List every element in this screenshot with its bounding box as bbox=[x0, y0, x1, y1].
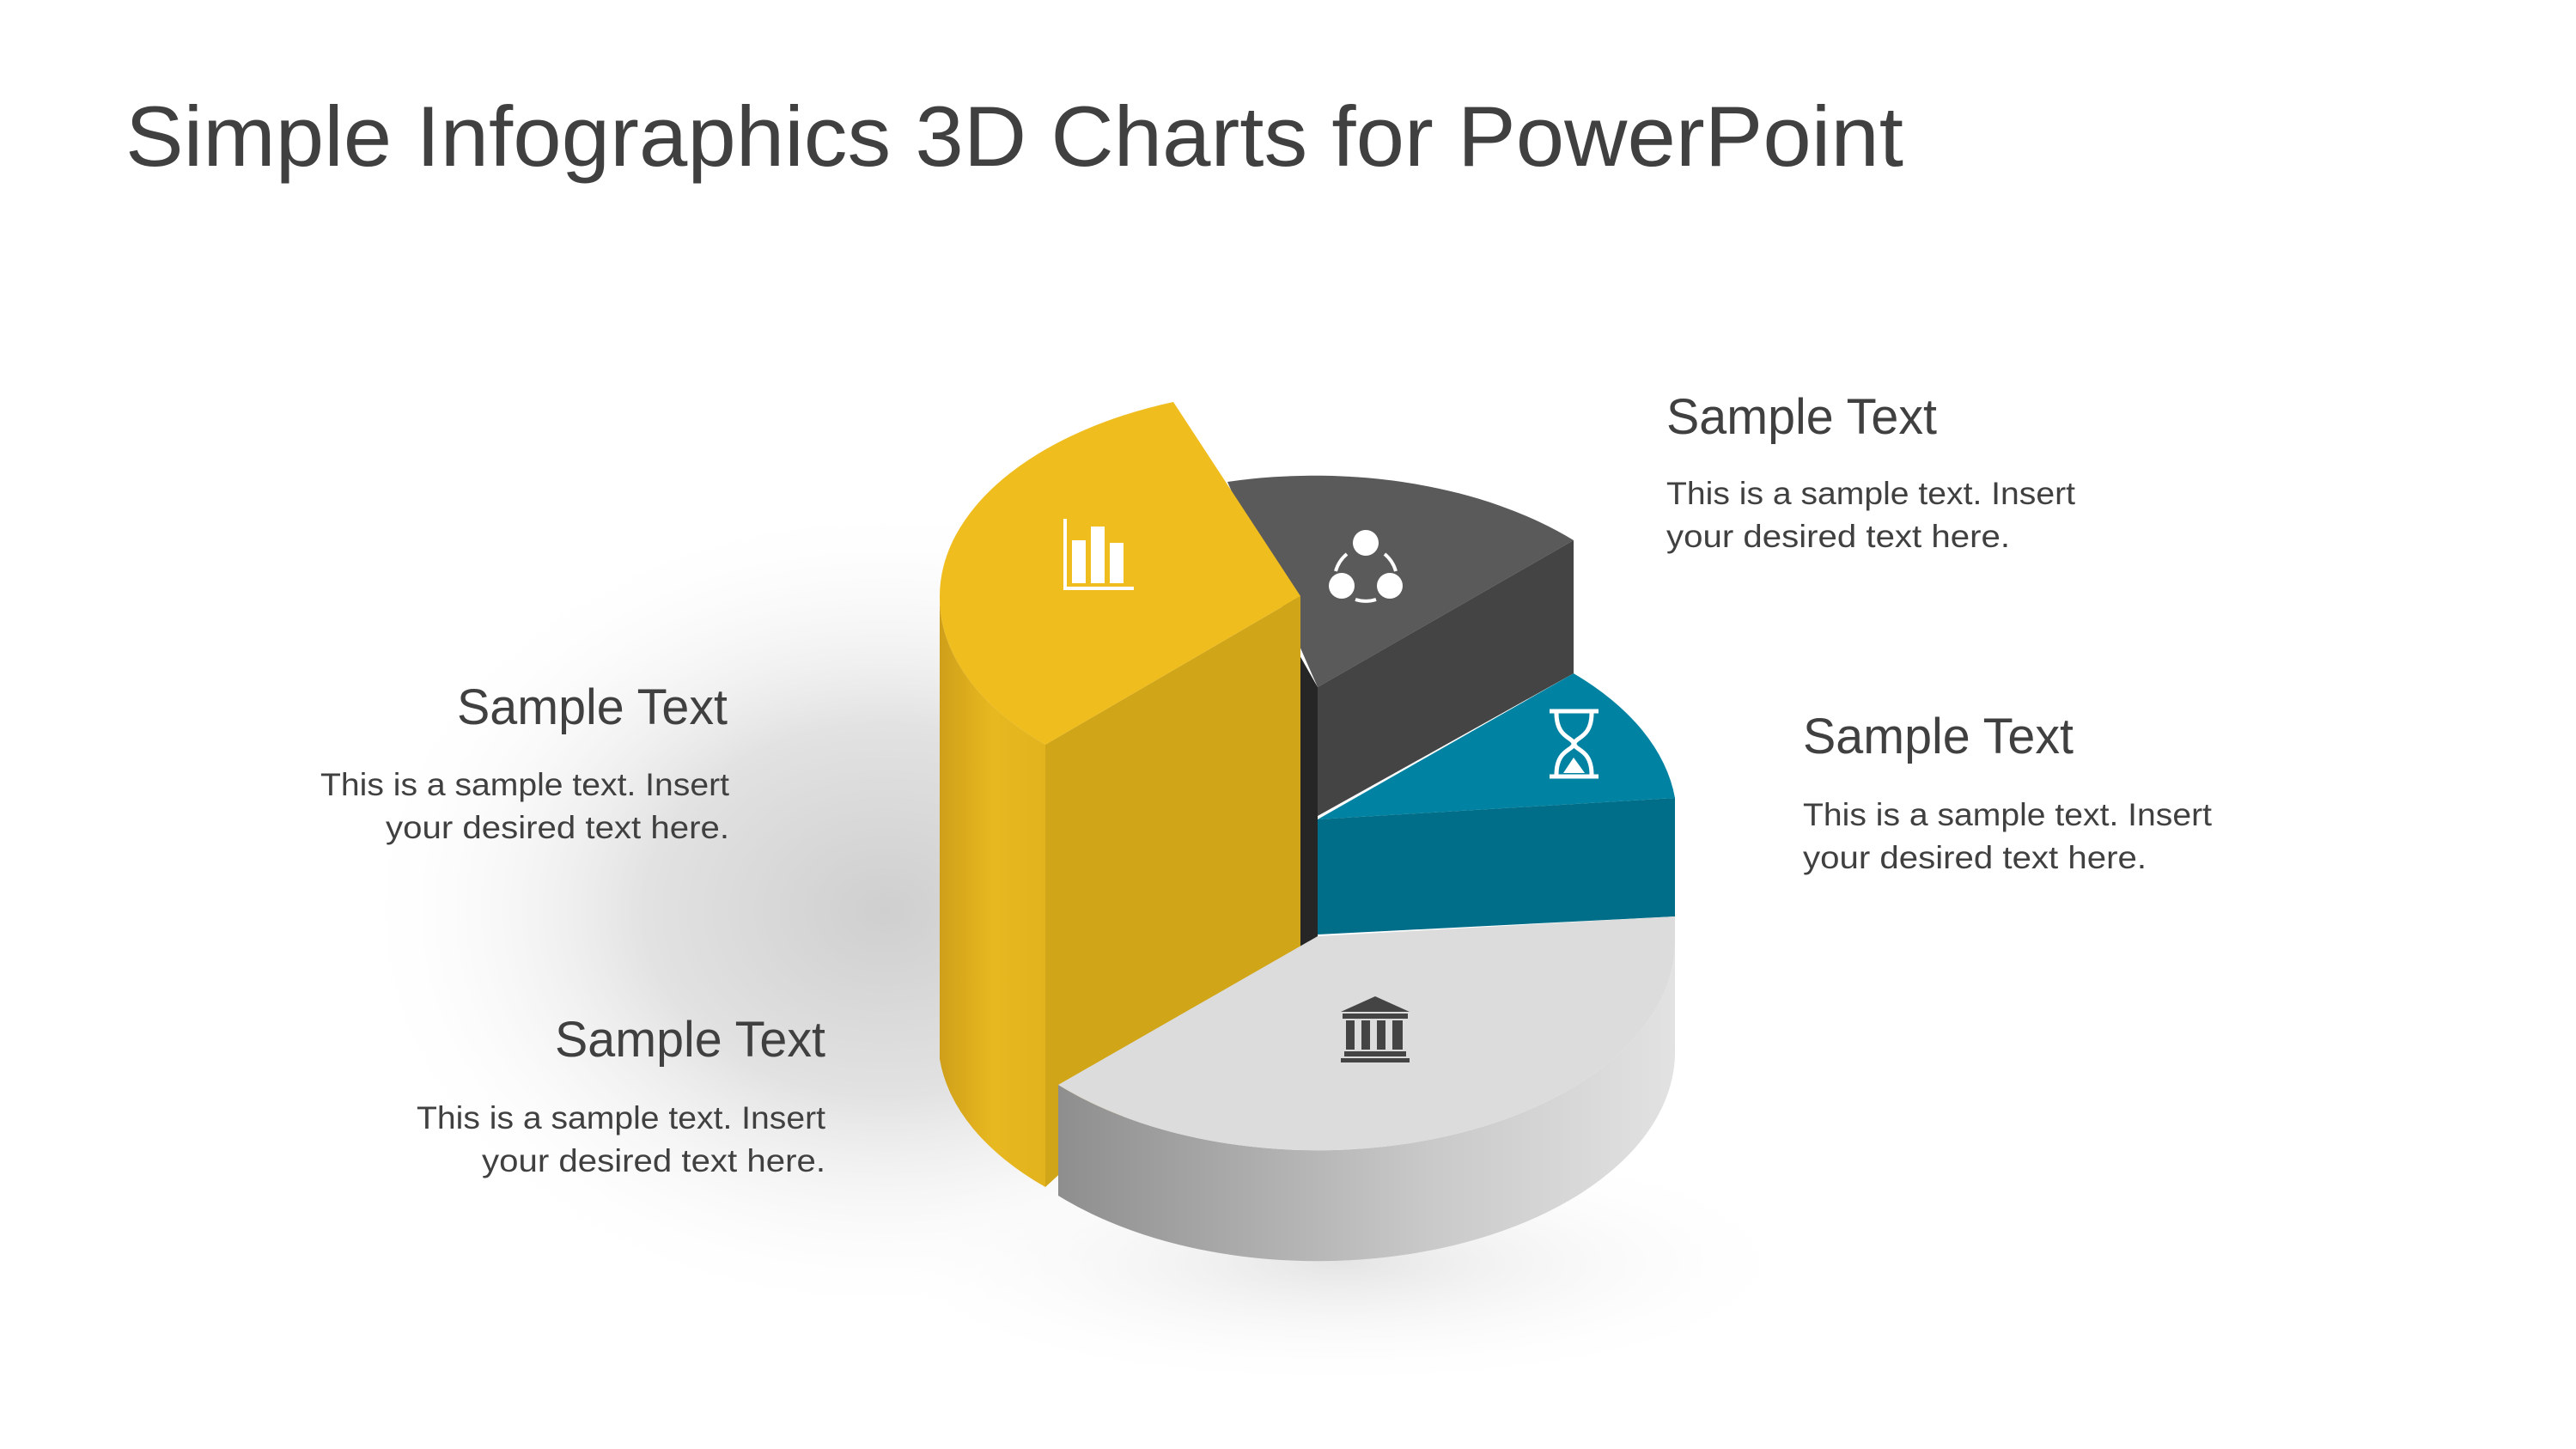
icon: bank bbox=[1341, 996, 1410, 1062]
icon: network cycle bbox=[1329, 530, 1403, 601]
text block: right: Sample Text bbox=[1803, 709, 2074, 764]
slice: yellow bbox=[940, 402, 1300, 1187]
text block: top right bbox=[1666, 389, 2076, 554]
slice: light gray bbox=[1058, 916, 1675, 1261]
text block: left top bbox=[320, 679, 730, 845]
text block: left top: This is a sample text. Insert bbox=[320, 767, 730, 802]
text block: left bottom: This is a sample text. Insert bbox=[417, 1100, 826, 1135]
text block: left bottom: Sample Text bbox=[555, 1012, 825, 1068]
shadow bbox=[352, 498, 1417, 1323]
text block: right: This is a sample text. Insert bbox=[1803, 797, 2213, 832]
text block: right bbox=[1803, 709, 2213, 875]
text block: left top: your desired text here. bbox=[386, 810, 729, 845]
slice: dark gray bbox=[1227, 476, 1574, 953]
icon: hourglass bbox=[1550, 711, 1599, 776]
text block: top right: This is a sample text. Insert bbox=[1666, 476, 2076, 511]
title: Simple Infographics 3D Charts for PowerPoint bbox=[125, 88, 1903, 184]
icon: bar chart bbox=[1063, 519, 1134, 590]
text block: top right: Sample Text bbox=[1666, 389, 1937, 445]
3D pie chart bbox=[940, 402, 1675, 1261]
text block: right: your desired text here. bbox=[1803, 840, 2147, 875]
text block: left bottom: your desired text here. bbox=[482, 1143, 825, 1178]
text block: left bottom bbox=[417, 1012, 826, 1178]
text block: top right: your desired text here. bbox=[1666, 519, 2010, 554]
slice: teal bbox=[1318, 673, 1675, 935]
text block: left top: Sample Text bbox=[457, 679, 728, 735]
